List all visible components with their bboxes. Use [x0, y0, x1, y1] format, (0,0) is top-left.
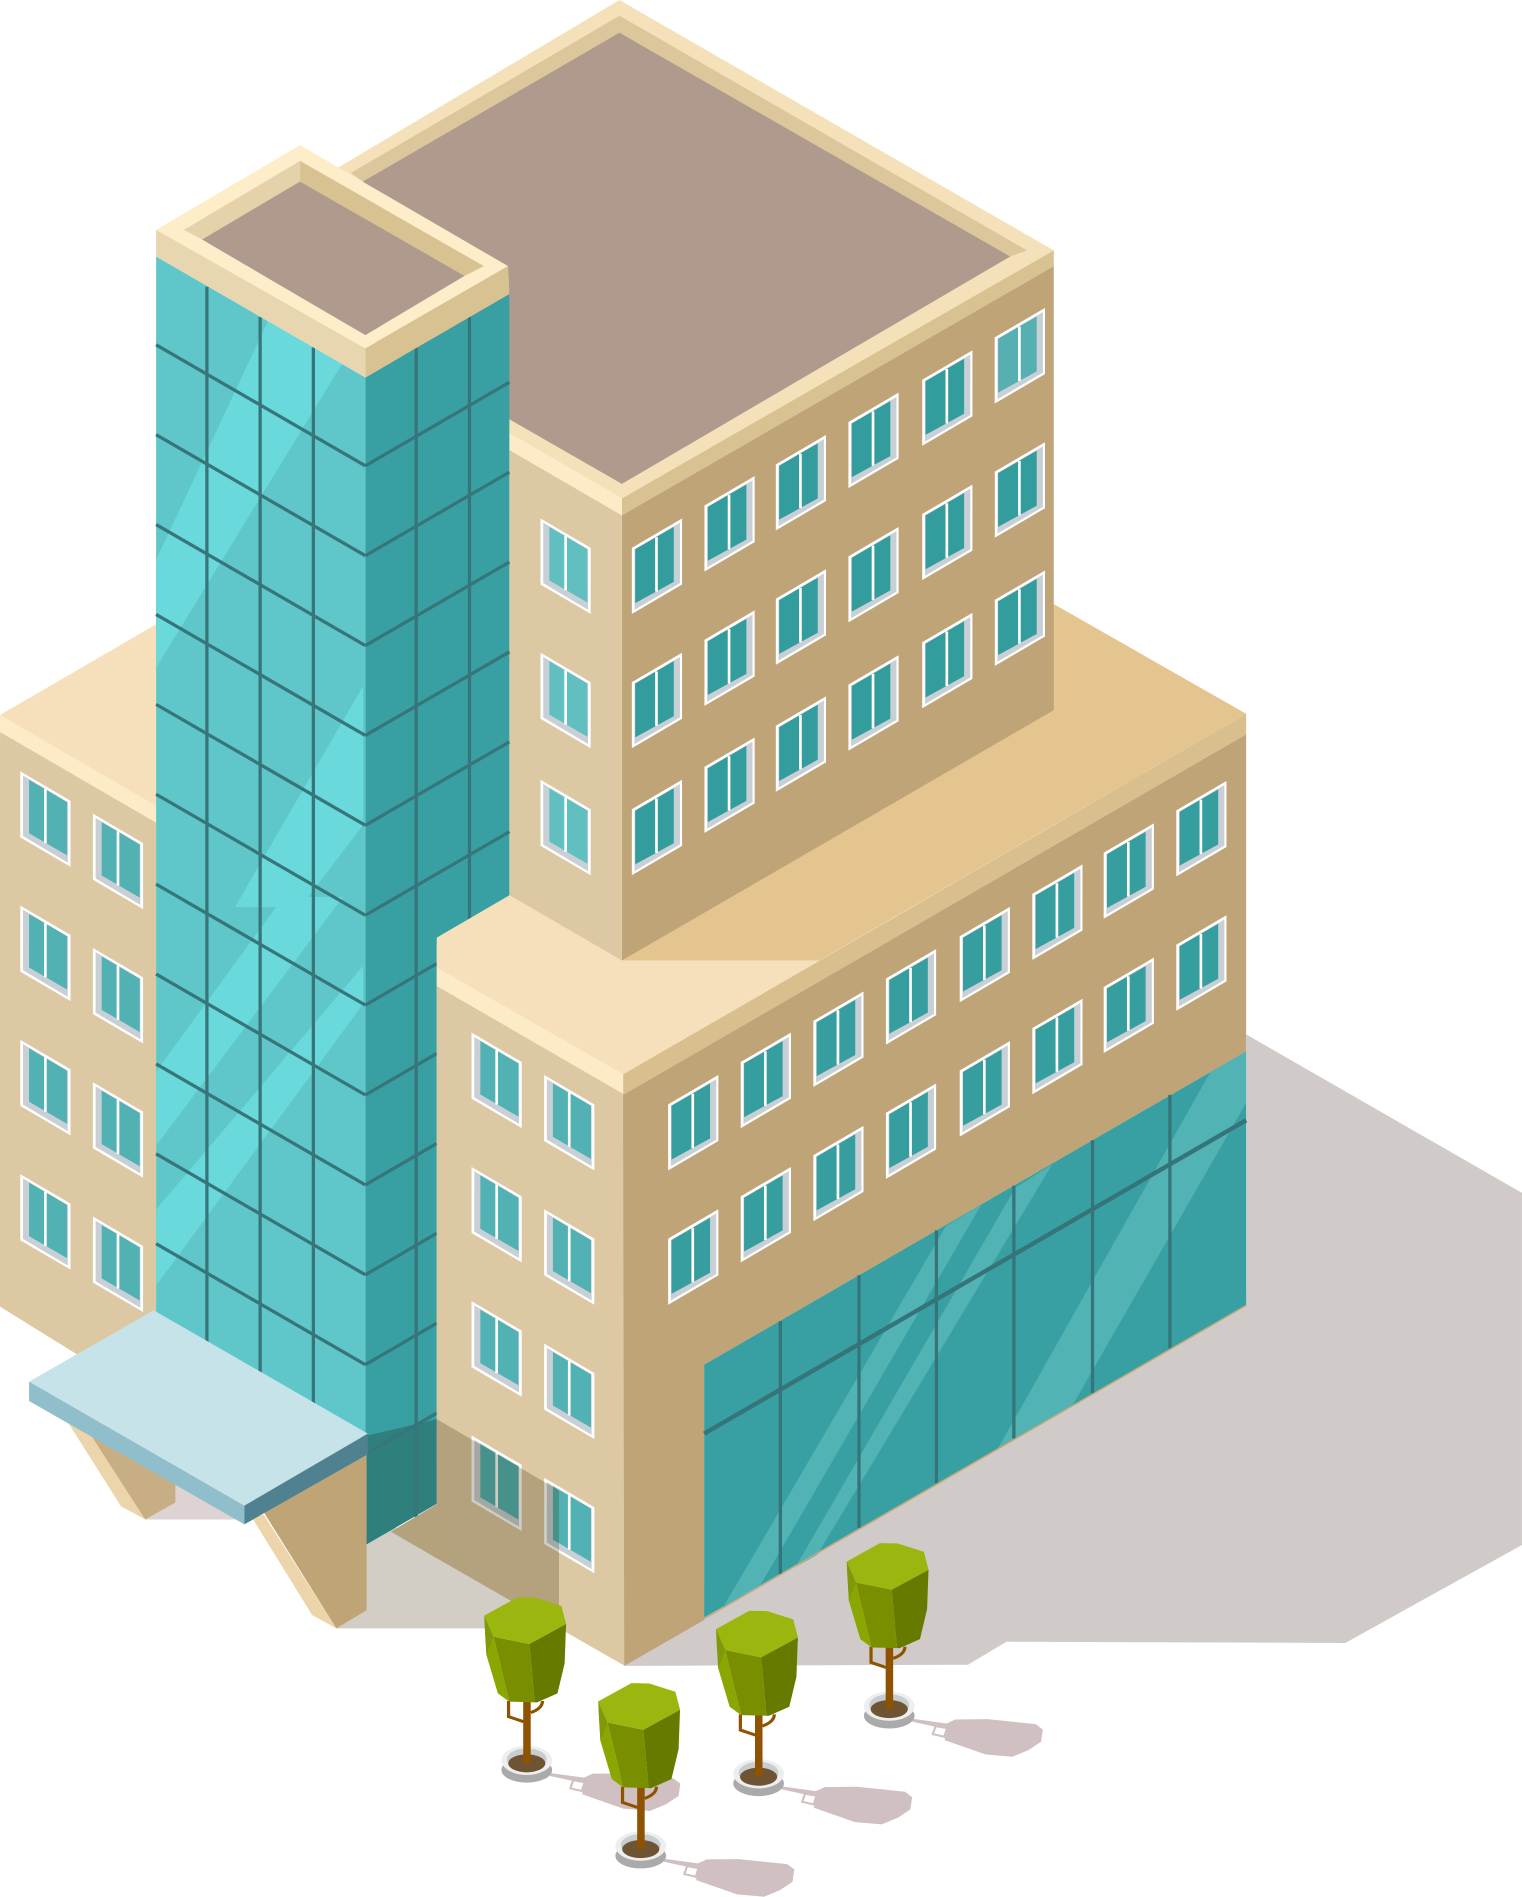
shadow on wall: [437, 1419, 559, 1628]
lower block right windows: [668, 782, 1226, 1304]
wing windows: [21, 772, 143, 1311]
big roof rim: [335, 0, 1054, 498]
tower roof surface: [202, 181, 465, 335]
storefront glass: [704, 1051, 1246, 1618]
upper tower left windows: [541, 519, 590, 875]
shaded base of glass: [365, 1419, 437, 1545]
storefront highlights: [723, 1052, 1246, 1608]
tree 3: [716, 1611, 798, 1796]
tower right wall: [622, 266, 1054, 961]
panel: glass tower: [156, 145, 509, 1545]
lower block right wall: [623, 734, 1246, 1666]
storefront frame: [704, 1095, 1246, 1574]
tree 4: [847, 1543, 929, 1728]
terrace far: [622, 596, 1246, 961]
panel: entrance canopy: [29, 1310, 368, 1628]
tower left wall: [509, 450, 622, 961]
terrace near: [437, 895, 819, 1074]
ground shadow: under canopy right: [336, 1524, 563, 1628]
panel: upper tower block: [335, 0, 1054, 961]
ground shadow: under canopy left: [145, 1484, 238, 1520]
tree 1: [484, 1597, 566, 1783]
upper tower right windows: [632, 309, 1045, 875]
tower parapet: [156, 145, 508, 348]
big roof surface: [363, 33, 1010, 484]
tree 2: [598, 1683, 680, 1868]
lower block shaded ground wedge: [391, 1504, 437, 1559]
glass highlights: [157, 321, 363, 1285]
canopy slab: [29, 1310, 368, 1506]
left pillar: [69, 1424, 175, 1520]
lower block left wall: [437, 986, 625, 1666]
tree shadows: [550, 1719, 1043, 1897]
ground shadow: right side: [624, 1034, 1522, 1666]
glass grid: [156, 287, 509, 1517]
panel: left wing: [0, 624, 156, 1403]
right pillar: [252, 1452, 367, 1628]
lower block left windows: [472, 1033, 594, 1573]
panel: lower block: [391, 714, 1246, 1666]
